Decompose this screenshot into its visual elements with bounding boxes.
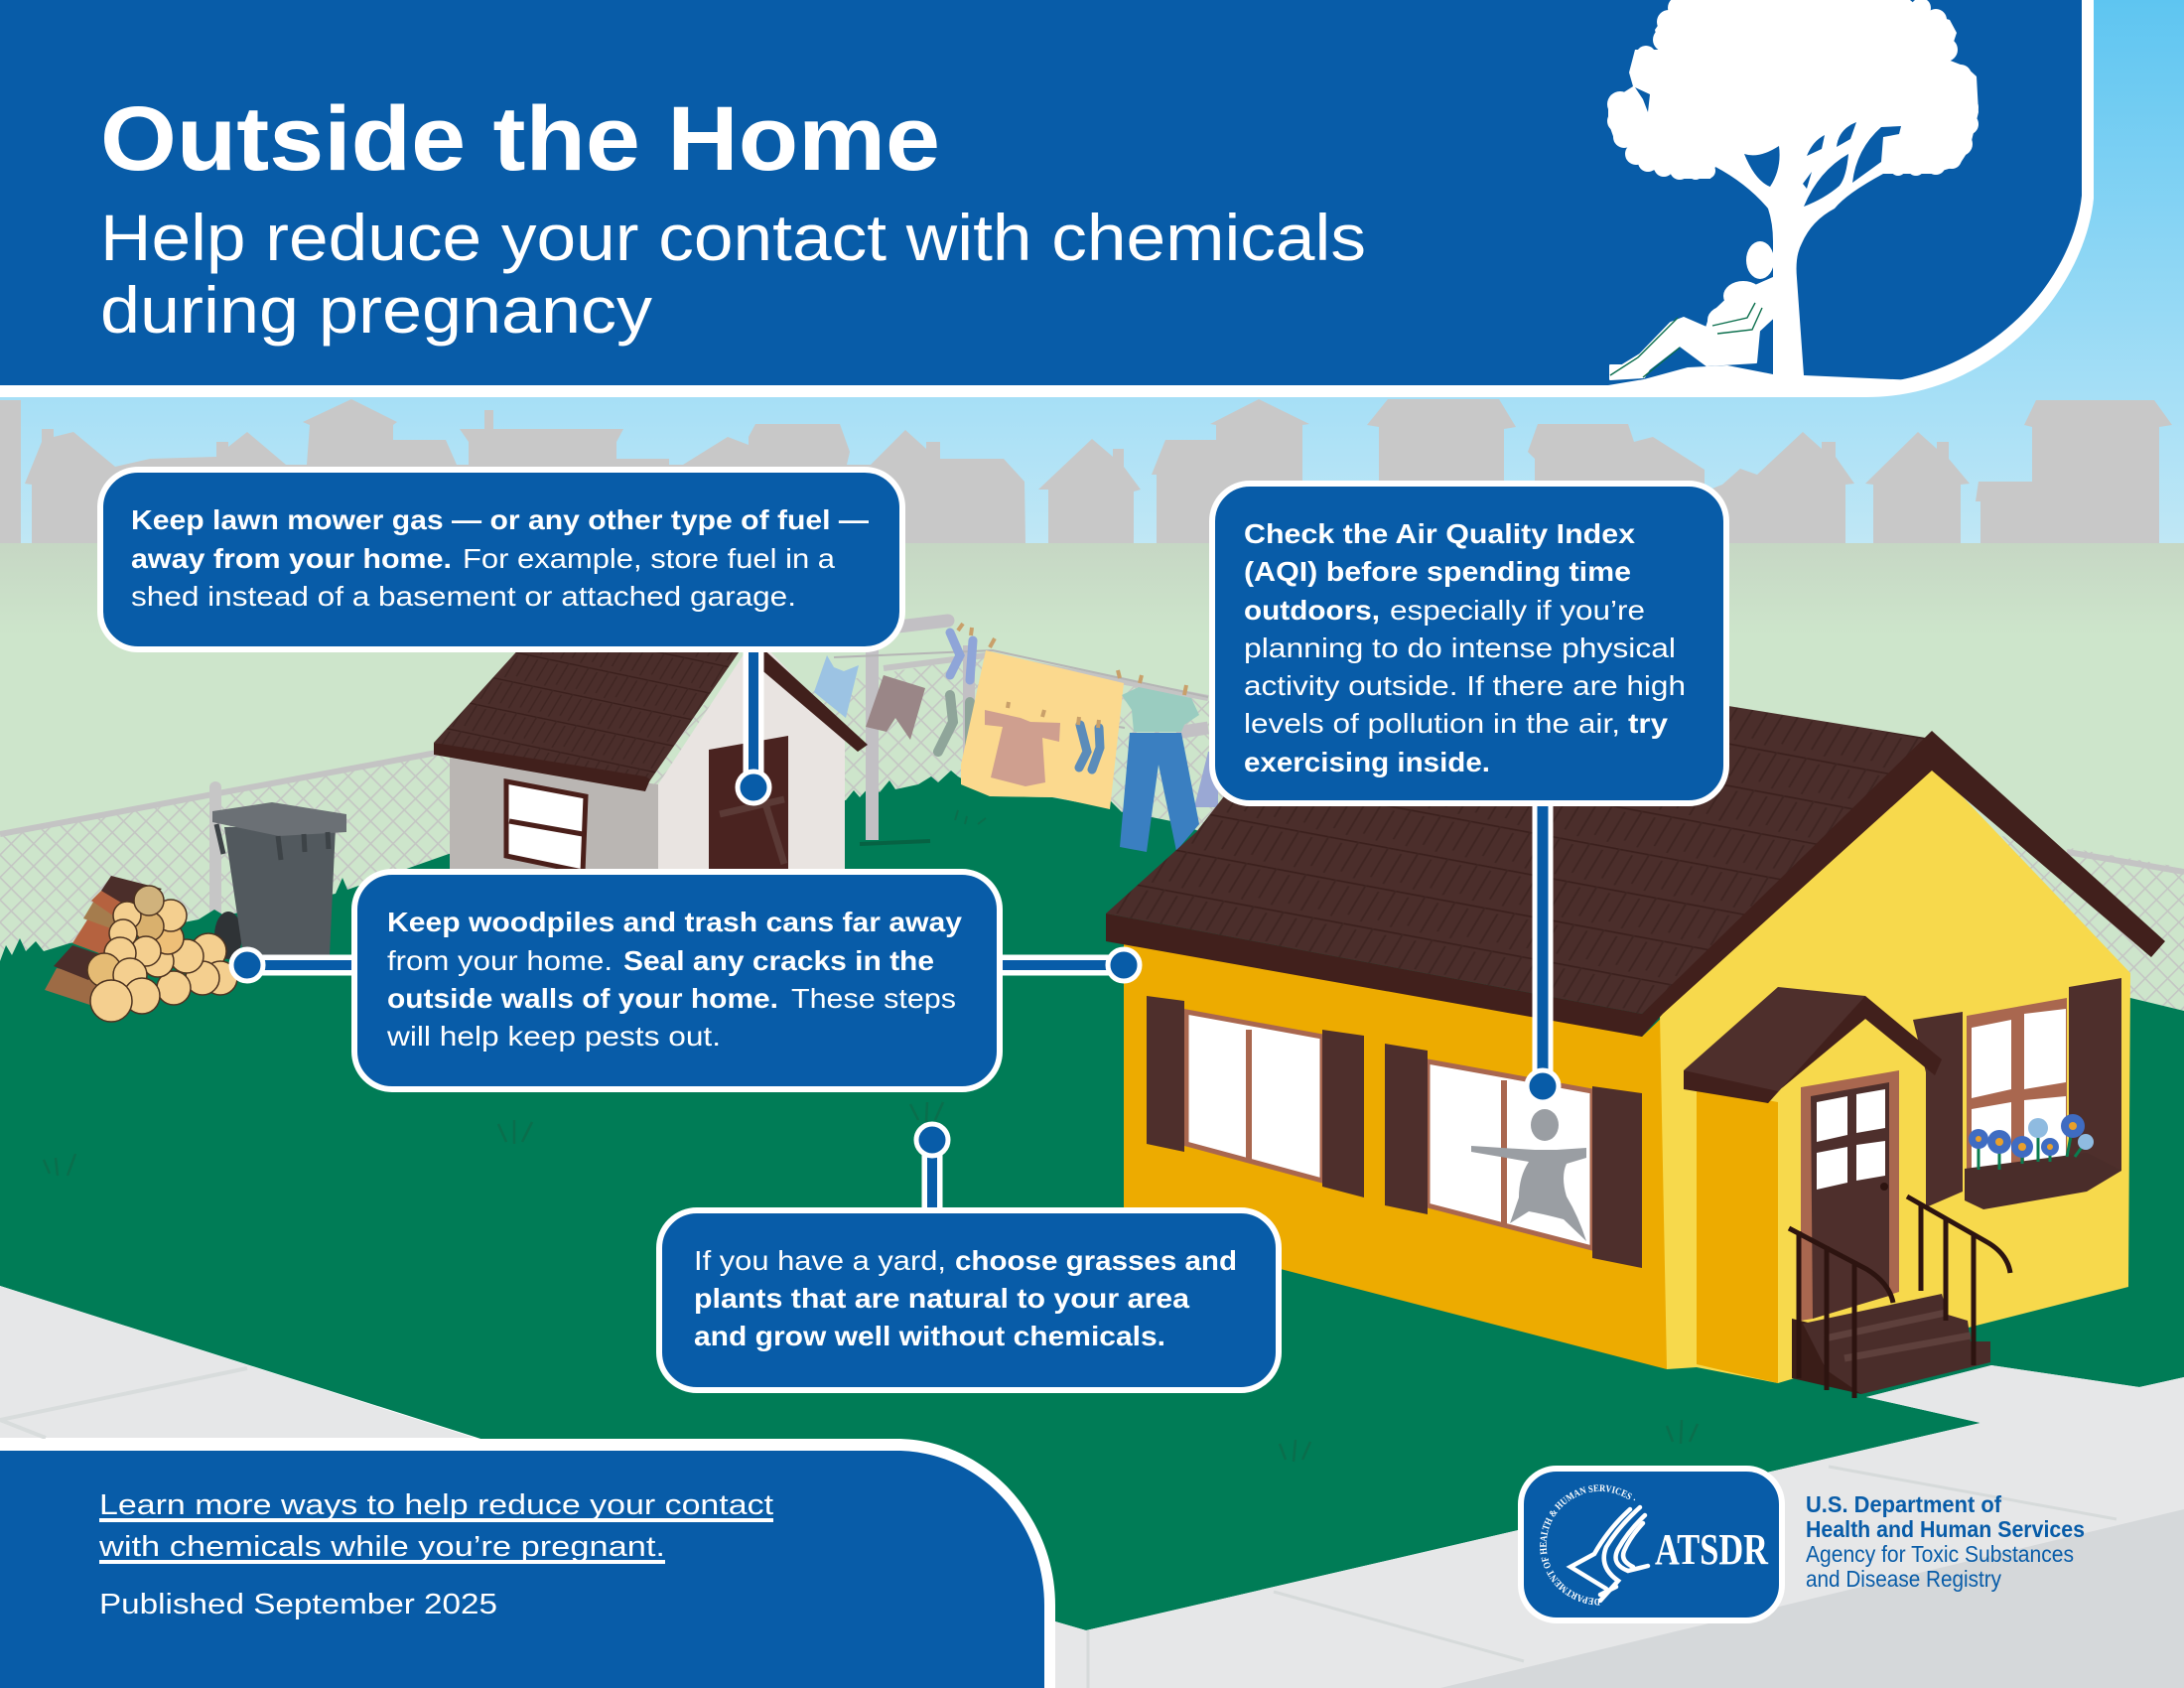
callout: air quality index: activity outside. If there are high [1244,670,1686,701]
lawn [0,771,2184,1630]
woodpile [45,876,237,1022]
publication date: Published September 2025 [99,1589,497,1620]
main roof [1106,635,1932,1014]
callout: yard plants: choose grasses and [955,1245,1237,1276]
callout: lawn mower fuel: away from your home. [131,543,452,574]
woman resting [1610,241,1774,379]
front window and flower box [1913,978,2121,1209]
subtitle: Help reduce your contact with chemicals [100,201,1366,274]
subtitle: during pregnancy [100,273,652,347]
subtitle [100,201,1366,347]
neighbourhood skyline [0,399,2172,543]
exercising person [1471,1109,1586,1241]
grass tufts [44,810,1698,1462]
front steps and railings [1789,1196,2010,1398]
callout: lawn mower fuel [100,470,902,803]
callout: woodpiles and trash cans: Keep woodpiles and trash cans far away [387,907,962,937]
clothesline with laundry [814,621,1218,852]
callout: lawn mower fuel: Keep lawn mower gas — or any other type of fuel — [131,504,869,535]
callout: air quality index: (AQI) before spending time [1244,556,1631,587]
callout: woodpiles and trash cans: will help keep pests out. [386,1021,721,1052]
callout: air quality index [1212,484,1726,1102]
trash can [212,802,346,959]
callout: woodpiles and trash cans: These steps [791,983,956,1014]
garden shed [434,645,868,874]
agency name [1806,1491,2085,1592]
callout: woodpiles and trash cans: Seal any cracks in the [623,945,934,976]
callout: yard plants: and grow well without chemicals. [694,1321,1165,1351]
ATSDR logo: ATSDR [1655,1525,1769,1574]
callout: woodpiles and trash cans: from your home. [387,945,613,976]
side windows [1147,996,1642,1268]
tree and woman silhouette [1584,0,1979,389]
callout: air quality index: outdoors, [1244,595,1380,626]
yellow house [1106,635,2165,1398]
agency name: U.S. Department of [1806,1491,2001,1517]
agency name: Health and Human Services [1806,1516,2085,1542]
callout: yard plants: plants that are natural to your area [694,1283,1189,1314]
callout: lawn mower fuel: For example, store fuel in a [463,543,835,574]
footer link text: with chemicals while you’re pregnant. [98,1531,665,1563]
callout: woodpiles and trash cans [231,872,1140,1089]
porch roof [1684,987,1942,1103]
title: Outside the Home [100,88,940,190]
callout: lawn mower fuel: shed instead of a basement or attached garage. [131,581,796,612]
callout: air quality index: try [1628,708,1668,739]
sky background [0,0,2184,543]
agency name: and Disease Registry [1806,1566,2001,1592]
callout: air quality index: exercising inside. [1244,747,1490,777]
ATSDR logo [1518,1466,1785,1623]
callout: woodpiles and trash cans: outside walls of your home. [387,983,778,1014]
front door [1801,1070,1899,1321]
sidewalk left [0,1286,475,1438]
agency name: Agency for Toxic Substances [1806,1541,2074,1567]
footer panel [0,1439,1055,1688]
meadow background [0,543,2184,1040]
sidewalk right and street [1055,1365,2184,1688]
header panel [0,0,2094,397]
footer link text: Learn more ways to help reduce your contact [99,1489,773,1521]
ATSDR logo: DEPARTMENT OF HEALTH & HUMAN SERVICES · USA [1540,1484,1636,1606]
callout: yard plants [659,1124,1279,1390]
footer link text [98,1489,773,1564]
house side wall [1124,933,1667,1369]
callout: air quality index: Check the Air Quality Index [1244,518,1635,549]
house front wall [1660,765,2130,1383]
callout: air quality index: levels of pollution in the air, [1244,708,1620,739]
callout: air quality index: especially if you’re [1390,595,1645,626]
callout: air quality index: planning to do intense physical [1244,633,1676,663]
callout: yard plants: If you have a yard, [694,1245,946,1276]
chain-link fence [0,655,2184,1033]
porch orange wall [1697,1087,1778,1383]
roof eave [1106,731,2165,1037]
